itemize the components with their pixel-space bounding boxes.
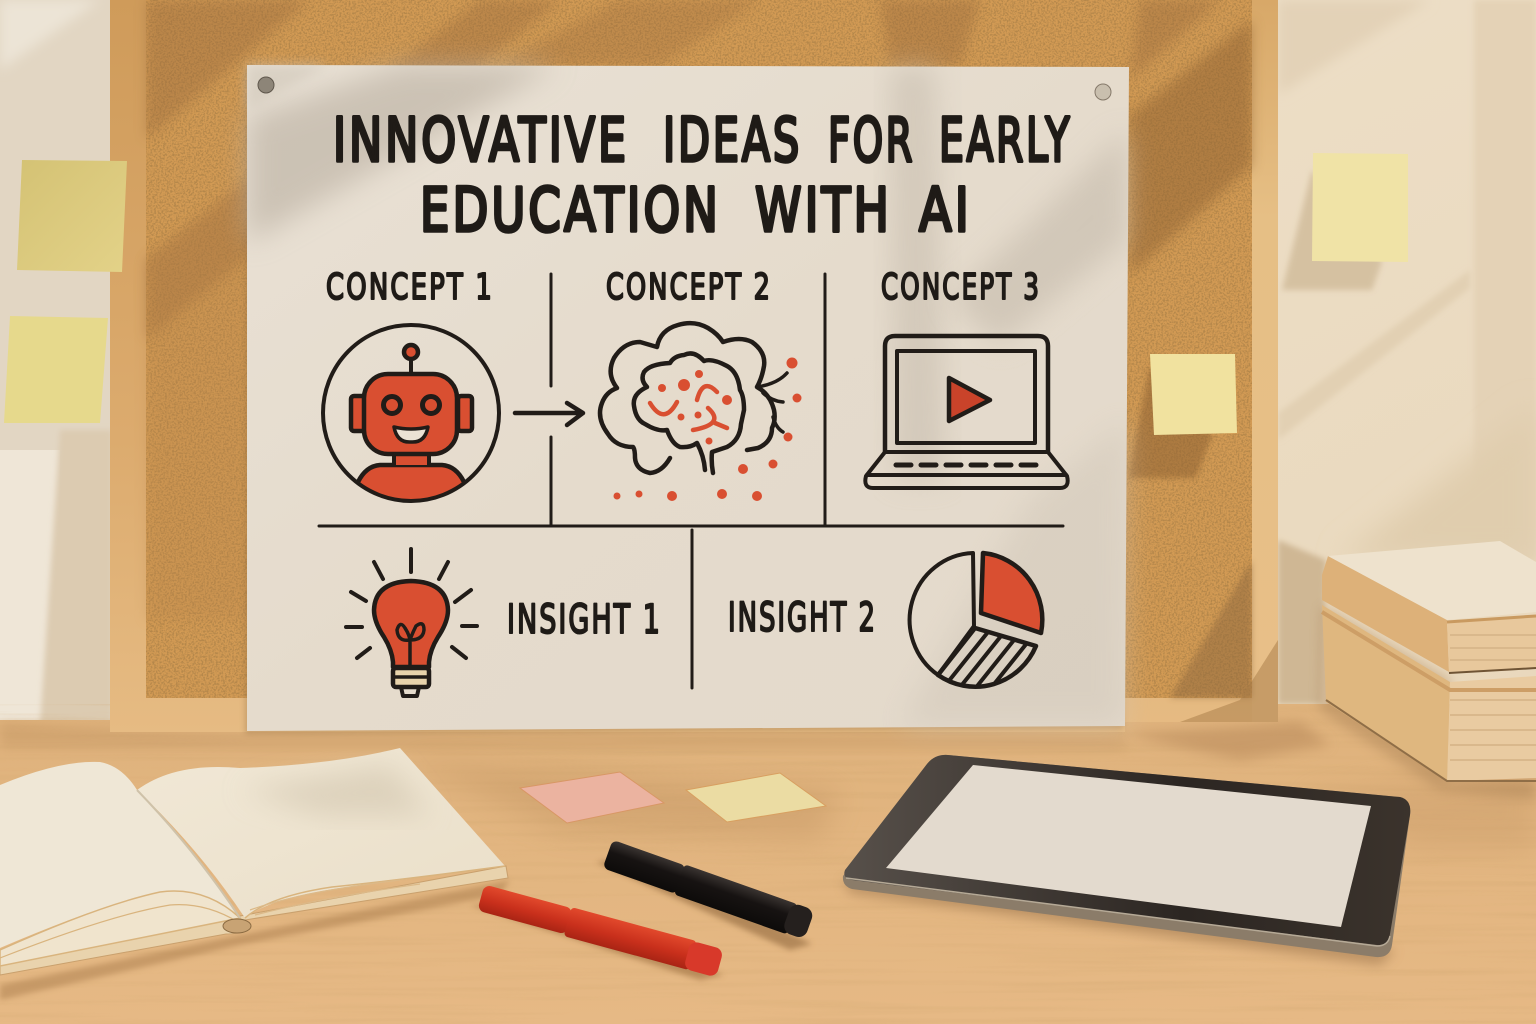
desk: [0, 704, 1536, 1024]
red marker: [470, 883, 724, 980]
arrow: [515, 403, 583, 425]
sticky note on the cork board: [1150, 354, 1237, 435]
wall background: [0, 0, 1536, 740]
pink sticky note on desk: [520, 772, 664, 823]
title: IDEAS: [663, 105, 802, 176]
sticky notes on the wall: left top: [17, 160, 127, 272]
sticky note on the wall: right: [1312, 153, 1408, 262]
heading: concept 3: CONCEPT 3: [881, 267, 1041, 308]
upper book: [1322, 541, 1536, 673]
lower book: [1322, 605, 1536, 781]
yellow sticky note on desk: [686, 773, 826, 822]
title: WITH: [755, 175, 892, 246]
poster sheet: [245, 65, 1129, 734]
title: EARLY: [939, 105, 1072, 176]
icon: pie chart: [910, 553, 1042, 703]
notebook: [0, 748, 510, 1000]
title: FOR: [828, 105, 915, 176]
sticky note on the wall: left bottom: [4, 316, 108, 423]
divider lines: [319, 274, 1063, 688]
pin: right: [1095, 84, 1111, 100]
tablet screen: [886, 765, 1371, 927]
pin: left: [258, 77, 274, 93]
label: insight 2: INSIGHT 2: [728, 595, 877, 641]
icon: light bulb: [346, 549, 477, 696]
heading: concept 2: CONCEPT 2: [606, 267, 772, 308]
title: AI: [919, 175, 972, 246]
black marker: [596, 839, 815, 950]
icon: brain with data dots: [600, 323, 802, 501]
icon: laptop with play button: [865, 336, 1068, 488]
heading: concept 1: CONCEPT 1: [326, 267, 494, 308]
label: insight 1: INSIGHT 1: [507, 597, 662, 643]
icon: robot in circle: [323, 325, 499, 502]
title: INNOVATIVE: [333, 105, 629, 176]
sticky note shadow on wall: [1282, 170, 1382, 290]
title: EDUCATION: [420, 175, 721, 246]
books stack: [1320, 541, 1536, 800]
tablet: [843, 755, 1410, 965]
cork board: [110, 0, 1278, 732]
